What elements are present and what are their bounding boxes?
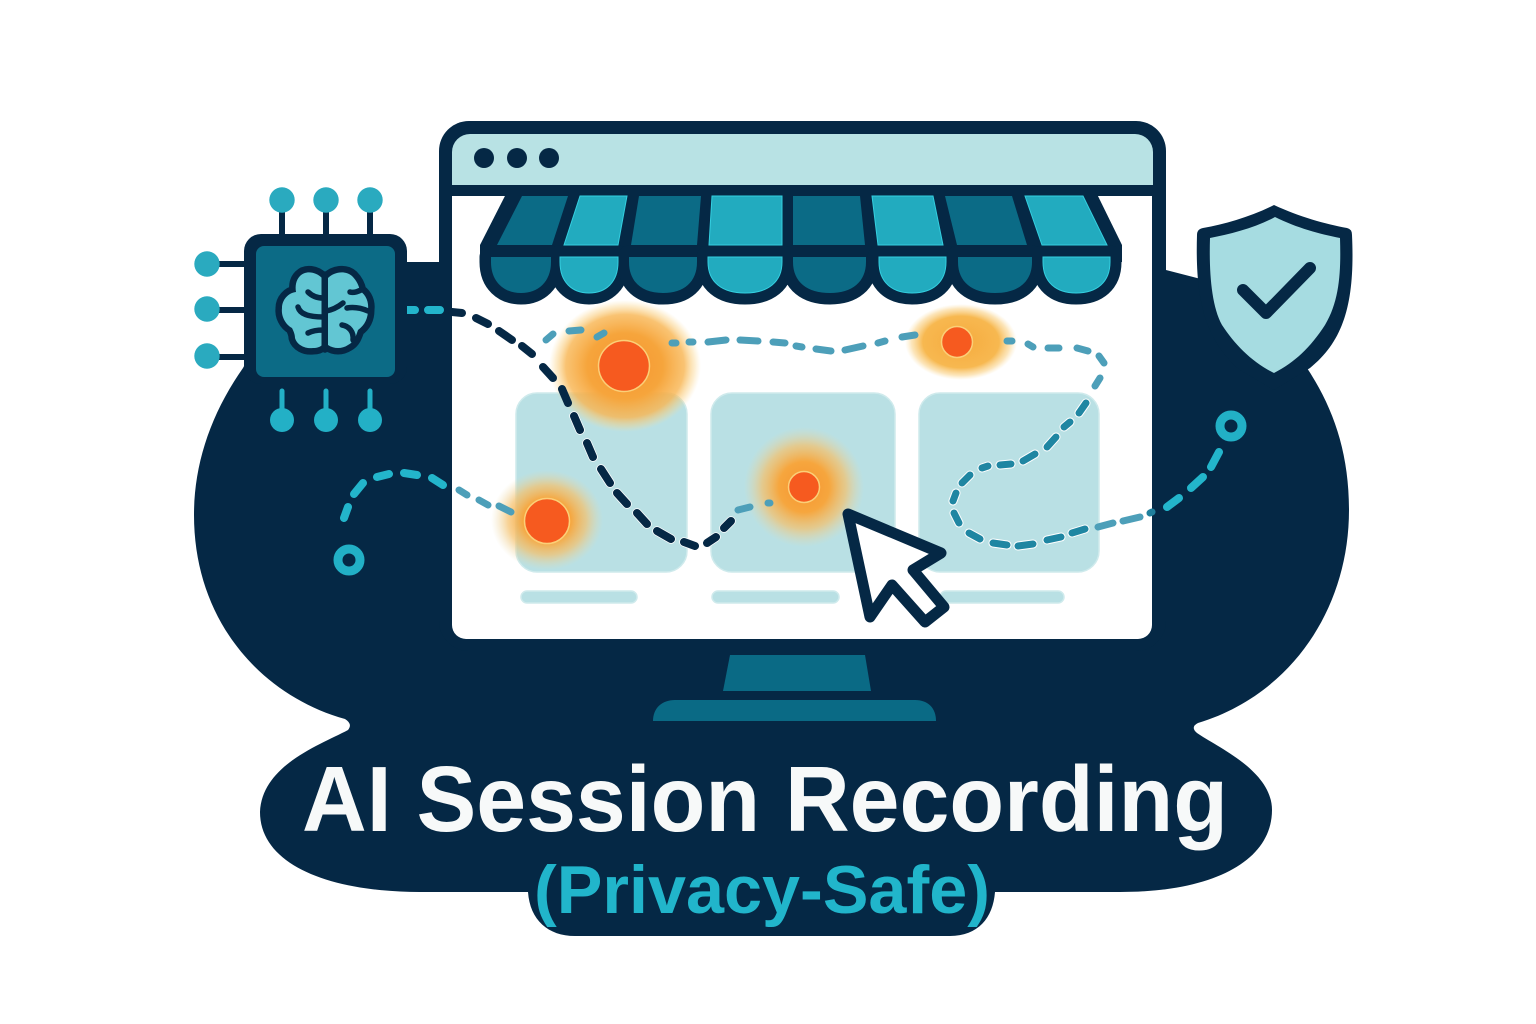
window dots bbox=[474, 148, 559, 168]
awning frame bbox=[480, 190, 1122, 293]
start node bbox=[338, 549, 360, 571]
awning bbox=[480, 190, 1122, 293]
dashed path: bright teal on dark background bbox=[344, 310, 1219, 518]
browser content area bbox=[452, 196, 1152, 639]
end node bbox=[1220, 415, 1242, 437]
shield with check bbox=[1197, 205, 1353, 390]
dashed path: dark journey bbox=[452, 312, 731, 546]
awning light stripes bbox=[560, 196, 1110, 293]
subtitle: (Privacy-Safe) bbox=[534, 852, 990, 928]
title: AI Session Recording bbox=[302, 747, 1228, 851]
dashed path: teal journey on white bbox=[459, 330, 1152, 546]
background blob bbox=[194, 262, 1349, 936]
monitor stand bbox=[653, 655, 936, 721]
icon: brain bbox=[282, 272, 368, 350]
chip pins bbox=[194, 187, 383, 432]
product cards bbox=[516, 393, 1099, 603]
browser window bbox=[439, 121, 1166, 651]
browser title bar bbox=[452, 134, 1153, 185]
heatmap spots bbox=[491, 300, 1017, 570]
awning dark stripes bbox=[491, 196, 1032, 293]
AI chip with brain bbox=[194, 187, 407, 432]
chip body bbox=[244, 234, 407, 384]
check mark bbox=[1243, 268, 1310, 313]
cursor arrow bbox=[848, 514, 944, 622]
